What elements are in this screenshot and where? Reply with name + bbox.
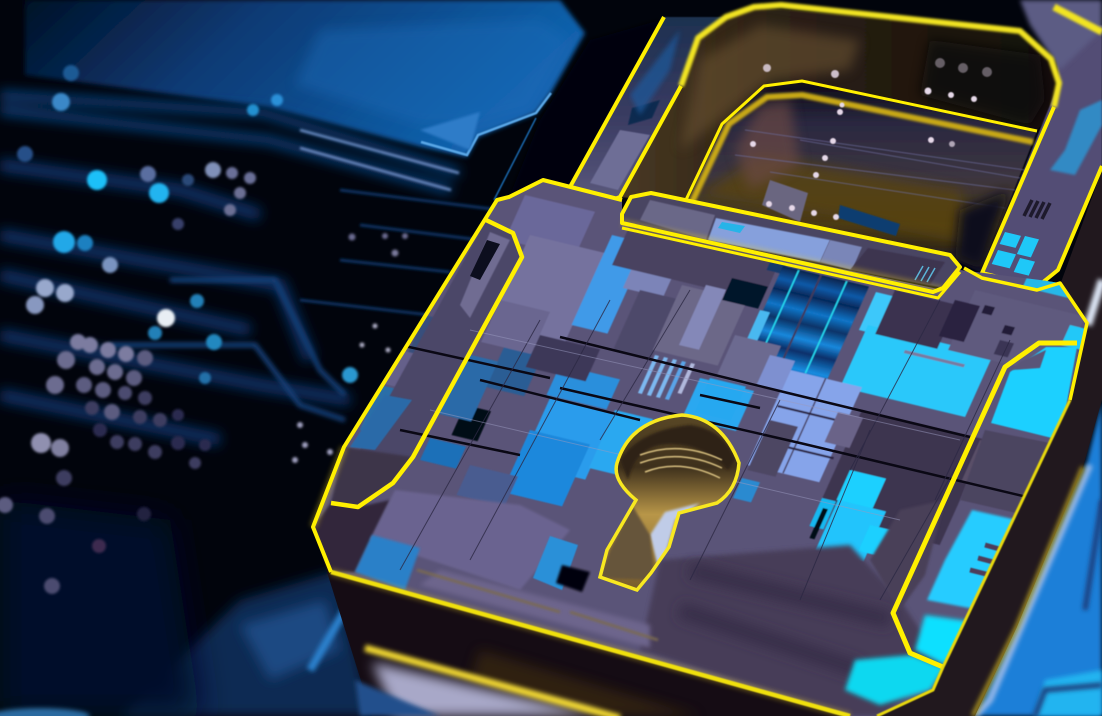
left inner outline (331, 220, 522, 507)
fine lines (400, 290, 1010, 600)
shackle top soft outlines (681, 5, 1102, 204)
shackle sharp outlines (570, 17, 1102, 287)
left panel light bit (460, 232, 510, 318)
band blue-grey blocks (708, 218, 830, 262)
side wall gold edge (973, 467, 1083, 716)
right leg blue strip (1050, 100, 1102, 175)
cyan lower left of panel (836, 470, 886, 509)
lit blue stripe (310, 610, 345, 670)
left leg blue glow (630, 30, 680, 115)
plate highlight edge (421, 93, 551, 155)
left panel slot (470, 240, 500, 280)
left horizontal bands (0, 165, 350, 440)
side wall glint (1088, 280, 1102, 325)
band outline (622, 193, 960, 292)
top right line (1054, 7, 1102, 32)
long blurred traces (0, 95, 459, 190)
upper right lit face (1020, 0, 1102, 70)
keyhole lower wall (600, 505, 655, 580)
inner back wall (620, 7, 1059, 204)
keyhole outline (600, 415, 739, 590)
padlock body underside (313, 527, 877, 716)
blue edge trace (494, 118, 536, 200)
right cyan panel (991, 347, 1077, 440)
upper parallel lines (430, 330, 960, 520)
black slot (722, 278, 768, 309)
left edge outline (313, 180, 622, 572)
underside pale reflection (372, 662, 600, 716)
lit trace tips (300, 130, 459, 190)
key-side blue (533, 536, 578, 590)
white dots in shackle (750, 58, 992, 220)
keyhole gold base (595, 410, 745, 600)
left leg face (570, 17, 726, 200)
bokeh light dots (0, 65, 408, 594)
lower left board (120, 570, 370, 716)
band right dark (850, 248, 945, 285)
underside yellow glow (365, 648, 620, 716)
small stripes (638, 355, 659, 394)
bottom teal (845, 655, 945, 705)
right grey panel (948, 303, 1080, 361)
surface dark trace (1035, 500, 1102, 716)
right leg dark stripes (1024, 200, 1050, 219)
top outer line (681, 5, 1059, 107)
body right side wall (877, 170, 1102, 716)
lavender squares (747, 370, 862, 482)
diagonal traces (110, 280, 345, 420)
right lower teal (915, 615, 975, 665)
band base (622, 193, 960, 288)
yellow glowing outlines of body (313, 180, 1087, 716)
void components dark (838, 205, 900, 236)
inner rail (684, 81, 1037, 204)
right lower blue surface (975, 400, 1102, 716)
upper left board panel (25, 0, 585, 157)
bright cyan blocks (858, 292, 893, 332)
right edge outline (877, 400, 1070, 716)
padlock body face (315, 182, 1085, 716)
far corner dark (313, 500, 390, 572)
void components (762, 180, 808, 222)
keyhole fill (595, 410, 745, 600)
bottom left blue (355, 535, 420, 590)
shackle inner void (651, 81, 1037, 273)
lavender plain (370, 490, 570, 590)
void horizontal streaks (735, 130, 1025, 208)
padlock shackle (570, 0, 1102, 287)
surface light square (1035, 670, 1102, 716)
left leg outline (570, 17, 681, 200)
key-side black (556, 565, 590, 592)
underside blue floor (355, 680, 440, 716)
void dark right corner (955, 190, 1010, 270)
band stripes (915, 266, 935, 282)
keyhole dark rim (620, 425, 735, 480)
right leg outline (982, 107, 1102, 287)
band lower double line (622, 228, 960, 298)
black circuit lines (400, 337, 1027, 497)
right leg face (982, 25, 1102, 287)
bottom edge outline (331, 572, 850, 716)
soft glow (313, 223, 943, 716)
lighter raised plate (295, 20, 570, 125)
band chip (718, 222, 745, 233)
top band of lock (622, 193, 960, 288)
dark right center (815, 410, 987, 545)
gold thin strip (417, 570, 658, 640)
background circuit board (0, 0, 660, 716)
between yellow and edge panel (960, 430, 1048, 512)
left leg circuit (590, 130, 650, 190)
lower left corner dark (331, 447, 413, 507)
left dark panels (362, 222, 520, 456)
band left blocks (640, 200, 715, 240)
lower foreground dark (640, 545, 945, 716)
void warm light streak (735, 100, 800, 190)
left blue strip (350, 395, 412, 450)
bottom edge light (0, 708, 90, 716)
striped blue panel (757, 266, 870, 380)
right cyan notch (1012, 350, 1046, 370)
dark block (875, 290, 957, 349)
keyhole (595, 410, 745, 600)
right lower cyan (927, 510, 1017, 612)
board edge corner (420, 112, 480, 150)
fine streaks by the lock (300, 190, 500, 315)
keyhole inner rings (640, 449, 722, 478)
foreground bands (680, 570, 890, 670)
cyan chips below stripes (708, 378, 746, 390)
underside warm glow (470, 650, 700, 716)
dark stripes on cyan (970, 545, 1003, 575)
lower left block (240, 600, 340, 680)
wall warm glow (680, 25, 860, 150)
left leg dark chip (628, 100, 660, 125)
right inner outline (893, 343, 1077, 667)
band pale end (820, 240, 862, 270)
lower right plain (870, 502, 940, 606)
surface pale edge (975, 465, 1090, 716)
wall dark right (920, 40, 1045, 125)
void golden glow (700, 155, 970, 245)
keyhole blue glint (650, 503, 700, 575)
circuit blocks (360, 195, 1084, 562)
body base (316, 182, 1085, 716)
lower far left shade (0, 500, 200, 716)
lower lavender strip (420, 570, 650, 648)
black gap behind shackle (510, 20, 660, 195)
soft lower rail (691, 95, 1033, 204)
mid left blue blocks (534, 398, 614, 480)
right corner top outline (964, 268, 1087, 400)
right leg cyan blocks (992, 232, 1039, 276)
